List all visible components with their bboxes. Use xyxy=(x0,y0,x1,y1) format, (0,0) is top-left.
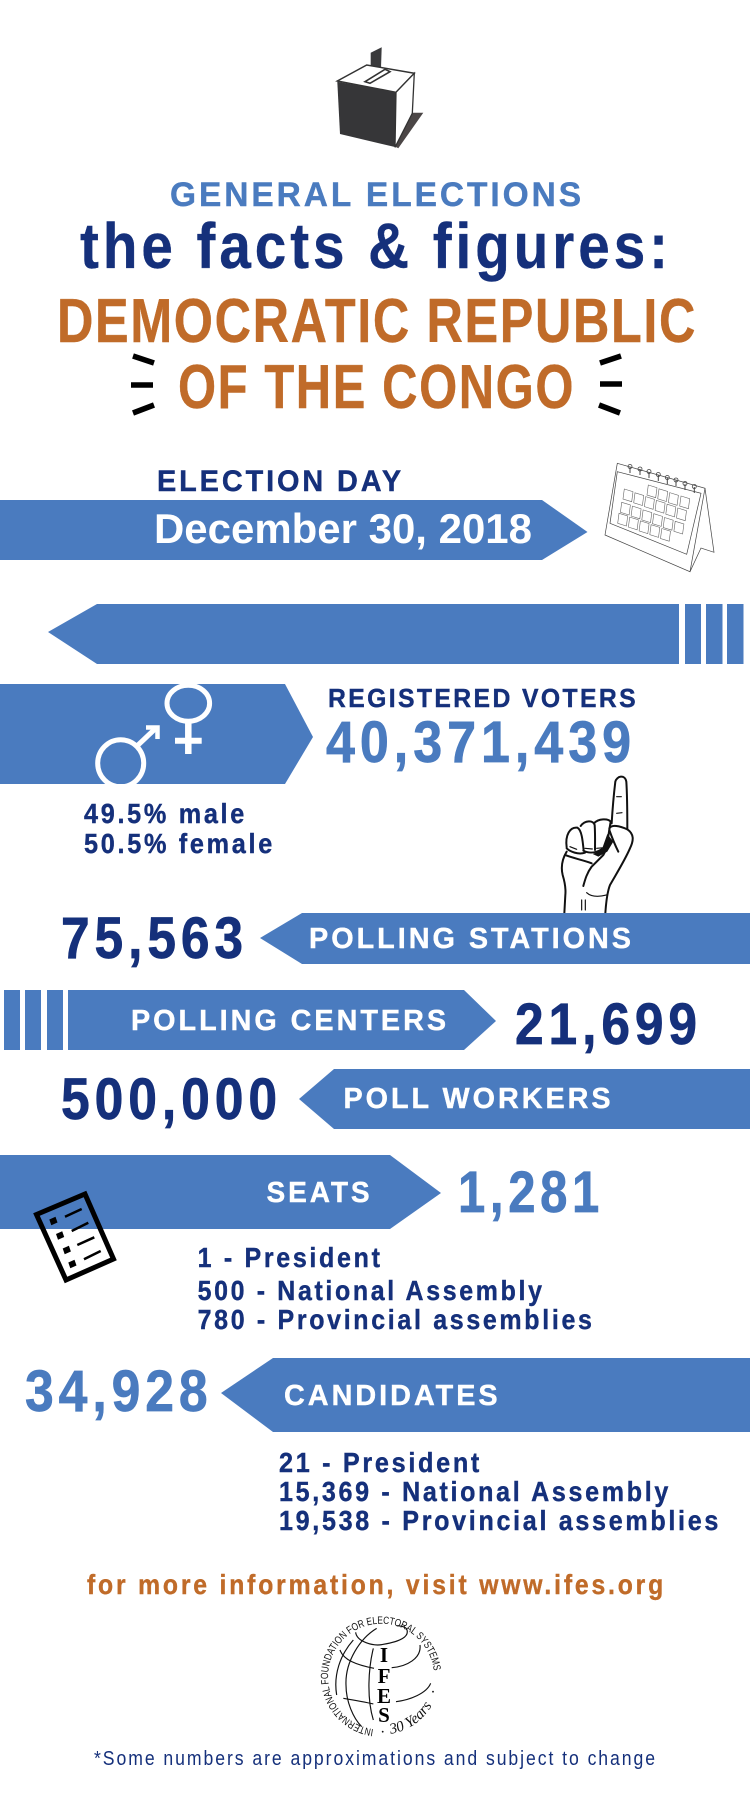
text: candidates breakdown: 15,369 - National Assembly xyxy=(279,1476,671,1507)
arrow: election day xyxy=(0,500,588,560)
value: poll workers: 500,000 xyxy=(61,1067,282,1132)
heading: general elections: GENERAL ELECTIONS xyxy=(170,176,584,214)
panel: candidates xyxy=(25,1358,750,1536)
text: candidates breakdown xyxy=(279,1447,721,1536)
arrow: decorative pencil banner xyxy=(48,604,744,664)
panel: election day xyxy=(0,465,588,560)
panel: polling centers xyxy=(4,990,702,1057)
text: candidates breakdown: 21 - President xyxy=(279,1447,482,1478)
logo: IFES globe: 30 Years xyxy=(390,1702,431,1734)
logo: IFES globe: S xyxy=(378,1703,390,1727)
call to action: more information: for more information, visit www.ifes.org xyxy=(87,1569,666,1600)
label: registered voters: REGISTERED VOTERS xyxy=(328,683,638,713)
label: poll workers: POLL WORKERS xyxy=(344,1083,614,1115)
arrow: polling stations xyxy=(260,913,750,964)
heading: of the congo: OF THE CONGO xyxy=(178,353,575,422)
value: candidates: 34,928 xyxy=(25,1359,213,1424)
value: registered voters: 40,371,439 xyxy=(326,710,636,775)
label: election day: ELECTION DAY xyxy=(157,465,404,498)
value: polling centers: 21,699 xyxy=(515,992,702,1057)
icon: checklist xyxy=(36,1194,114,1280)
text: gender split: 49.5% male xyxy=(84,798,247,829)
value: seats: 1,281 xyxy=(458,1160,604,1225)
panel: seats xyxy=(0,1155,604,1335)
logo: IFES globe: INTERNATIONAL FOUNDATION FOR ELECTORAL SYSTEMS xyxy=(320,1616,441,1736)
label: polling stations: POLLING STATIONS xyxy=(309,923,634,955)
footnote: *Some numbers are approximations and subject to change xyxy=(94,1748,657,1770)
panel: poll workers xyxy=(61,1067,750,1132)
icon: pointing hand xyxy=(562,777,633,913)
text: seats breakdown xyxy=(198,1242,595,1335)
logo: IFES globe: F xyxy=(378,1664,390,1688)
value: polling stations: 75,563 xyxy=(61,906,248,971)
arrow: voters banner xyxy=(0,684,313,784)
text: gender split: 50.5% female xyxy=(84,828,275,859)
icon: ballot box xyxy=(337,47,423,148)
arrow: candidates xyxy=(221,1358,750,1432)
label: seats: SEATS xyxy=(266,1177,372,1209)
label: candidates: CANDIDATES xyxy=(284,1380,501,1412)
text: seats breakdown: 1 - President xyxy=(198,1242,383,1273)
icon: gender symbols xyxy=(98,685,210,787)
arrow: poll workers xyxy=(299,1069,750,1129)
arrow: seats xyxy=(0,1155,441,1229)
logo: IFES globe: I xyxy=(380,1643,388,1667)
panel: polling stations xyxy=(61,906,750,971)
text: gender split xyxy=(84,798,275,859)
heading: the facts and figures: the facts & figures: xyxy=(80,210,672,282)
text: seats breakdown: 500 - National Assembly xyxy=(198,1275,545,1306)
arrow: polling centers xyxy=(4,990,496,1050)
icon: desk calendar xyxy=(605,463,714,572)
value: election date: December 30, 2018 xyxy=(154,505,532,552)
decorative ticks beside the heading xyxy=(131,356,622,413)
logo: IFES globe: E xyxy=(377,1684,391,1708)
text: seats breakdown: 780 - Provincial assemblies xyxy=(198,1304,595,1335)
panel: registered voters xyxy=(0,683,638,859)
label: polling centers: POLLING CENTERS xyxy=(131,1005,449,1037)
